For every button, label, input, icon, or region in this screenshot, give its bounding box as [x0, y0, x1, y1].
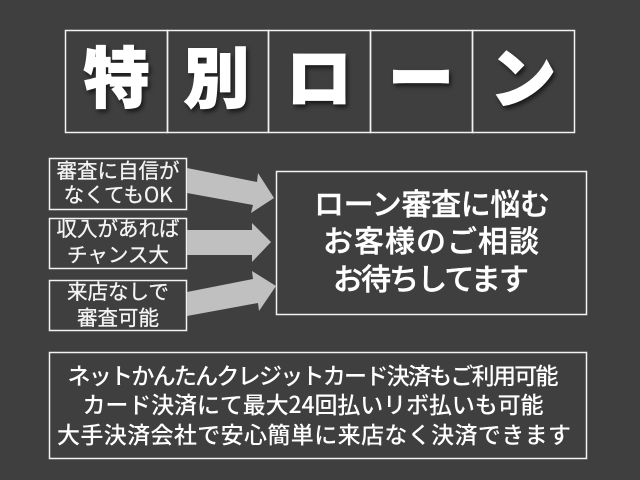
text box: 審査に自信がなくてもOK: 審査に自信が — [56, 154, 180, 184]
text box: 審査に自信がなくてもOK: なくてもOK — [64, 178, 173, 208]
title cell 1 — [66, 26, 168, 132]
panel: ローン審査に悩むお客様のご相談お待ちしてます: ローン審査に悩む — [314, 180, 550, 224]
panel: payment notes: ネットかんたんクレジットカード決済もご利用可能 — [68, 357, 558, 391]
text box: 審査に自信がなくてもOK — [50, 154, 186, 210]
title cell 2 — [168, 26, 268, 132]
panel: ローン審査に悩むお客様のご相談お待ちしてます: お待ちしてます — [333, 255, 529, 299]
title cell 3 — [268, 26, 370, 132]
text box: 収入があればチャンス大: 収入があれば — [56, 212, 180, 242]
arrow 1 — [187, 168, 274, 213]
panel: ローン審査に悩むお客様のご相談お待ちしてます: お客様のご相談 — [323, 217, 539, 261]
arrow 3 — [187, 271, 276, 316]
text box: 来店なしで審査可能: 審査可能 — [77, 301, 159, 331]
panel: ローン審査に悩むお客様のご相談お待ちしてます — [276, 172, 586, 314]
panel: payment notes — [50, 352, 586, 458]
text box: 来店なしで審査可能 — [50, 275, 186, 331]
panel: payment notes: 大手決済会社で安心簡単に来店なく決済できます — [57, 416, 571, 450]
title cell 4: ー — [388, 26, 454, 122]
panel: payment notes: カード決済にて最大24回払いリボ払いも可能 — [82, 386, 544, 420]
text box: 収入があればチャンス大: チャンス大 — [67, 238, 169, 268]
title cell 3: ロ — [286, 26, 352, 122]
arrow 2 — [187, 223, 271, 262]
title: 特別ローン — [66, 26, 574, 132]
title cell 1: 特 — [84, 26, 150, 122]
text box: 収入があればチャンス大 — [50, 212, 186, 268]
title cell 5: ン — [490, 26, 556, 122]
title cell 4 — [370, 26, 472, 132]
title cell 2: 別 — [184, 26, 250, 122]
title cell 5 — [472, 26, 574, 132]
text box: 来店なしで審査可能: 来店なしで — [67, 275, 169, 305]
